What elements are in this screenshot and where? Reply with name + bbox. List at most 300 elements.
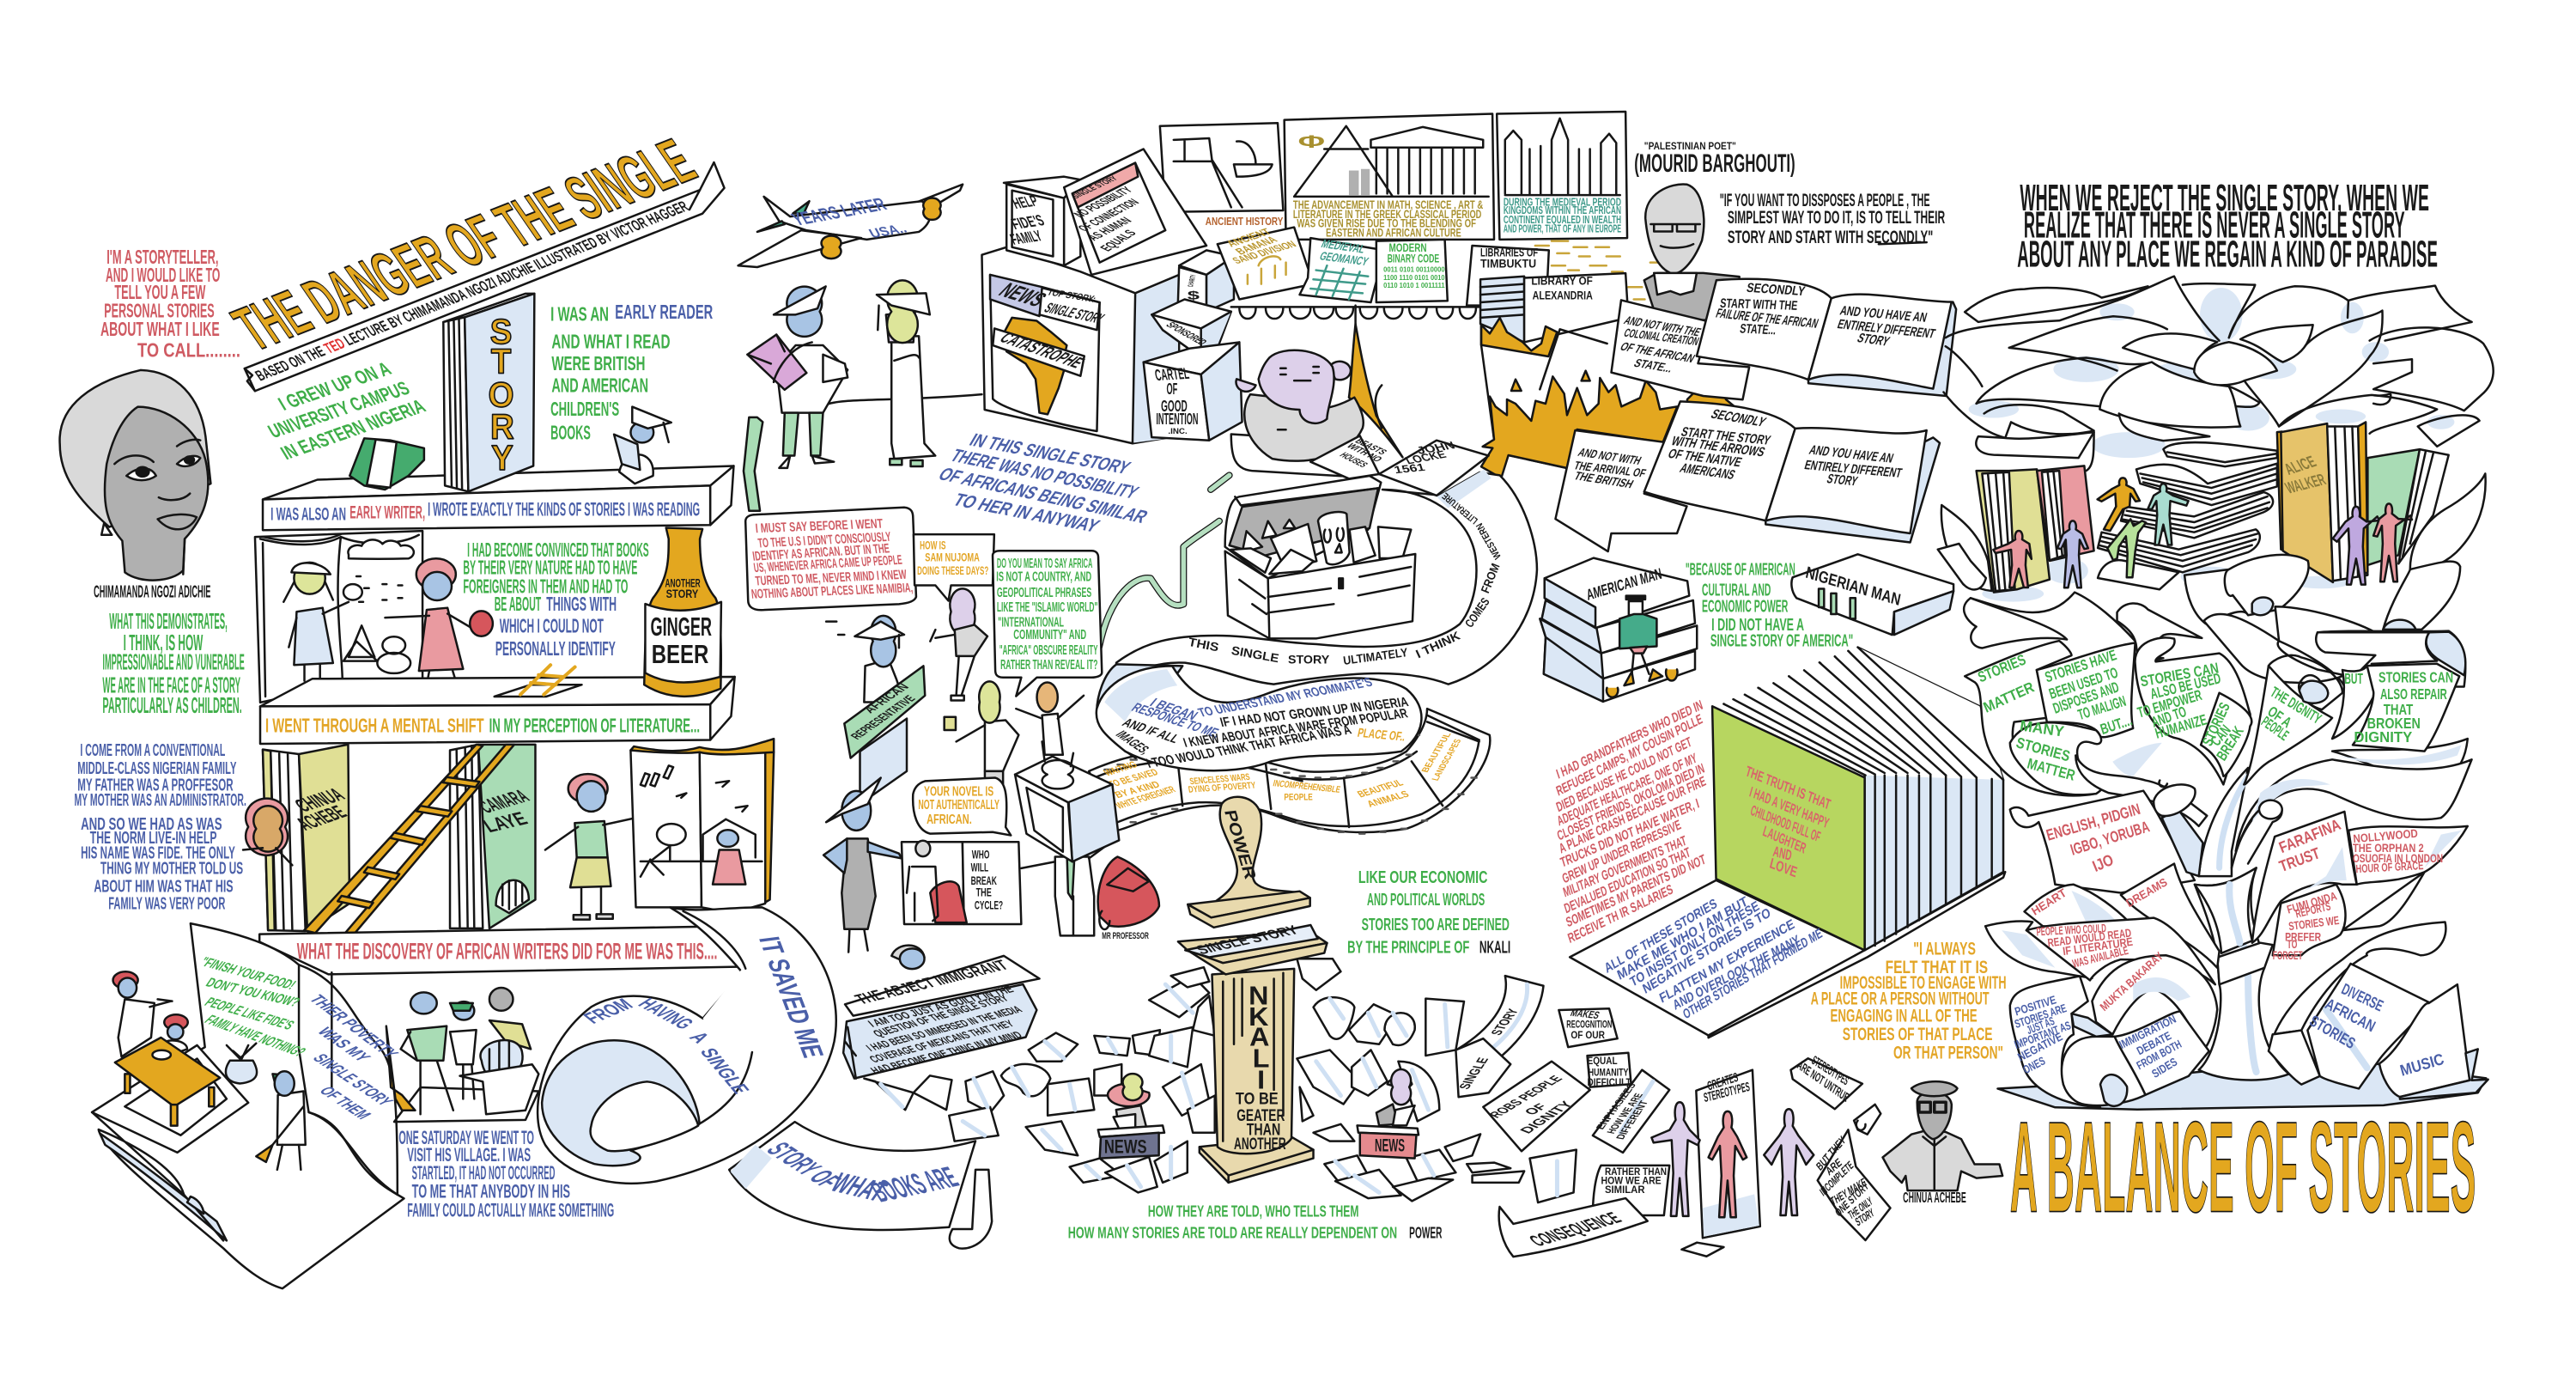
tilted screen: single story news: EQUALS [1097, 228, 1139, 253]
page: Fumi Onda [2273, 885, 2346, 955]
text: red tree labels: WAS AVAILABLE [2071, 944, 2129, 971]
figure: girl peeking from behind the book [243, 799, 292, 865]
book stack and Library of Alexandria: LIBRARY OF [1531, 275, 1593, 288]
text: their poverty: WAS MY [313, 1026, 374, 1064]
scroll text: STORY OF [759, 1138, 848, 1192]
text: red tree labels: FUMI ONDA [2286, 889, 2338, 916]
scroll text: WHAT [825, 1166, 893, 1207]
big book: side of pages: THE TRUTH IS THAT [1744, 764, 1832, 813]
ribbon: consequence: CONSEQUENCE [1524, 1209, 1626, 1250]
shelf one [263, 466, 733, 530]
page: robs people of dignity [1483, 1062, 1590, 1151]
bottle: ginger beer [644, 528, 721, 697]
illustration: storybook with children [255, 531, 493, 703]
text: finish your food [197, 954, 310, 1059]
open book: John Locke 1561: HOUSES [1337, 451, 1370, 469]
panel: conversations, film strip and professor: DOING THESE DAYS? [917, 563, 988, 577]
text: grandfathers: I HAD GRANDFATHERS WHO DIED IN [1555, 698, 1704, 782]
film strip: LANDSCAPES [1430, 738, 1463, 782]
panel: years later, USA, and the news: CONTINENT EQUALED IN WEALTH [1504, 213, 1621, 226]
The abject immigrant: QUESTION OF THE SINGLE STORY [870, 992, 1012, 1039]
panel: burning pages and Mourid Barghouti: "IF YOU WANT TO DISSPOSES A PEOPLE , THE [1720, 190, 1930, 210]
bubble: I must say: I MUST SAY BEFORE I WENT [755, 517, 884, 536]
sheet: creates stereotypes: STEREOTYPES [1703, 1080, 1751, 1105]
film strip: BY A KIND [1113, 779, 1163, 800]
page: colonial creation: OF THE AFRICAN [1618, 340, 1698, 365]
newsreader: left: NEWS [1104, 1137, 1147, 1158]
text: stories matter: OF A [2264, 703, 2295, 731]
book: open storybook with village [630, 739, 774, 913]
text: their poverty: SINGLE STORY [308, 1052, 397, 1109]
bubble: I must say [745, 508, 916, 610]
newsreader: right [1358, 1069, 1419, 1159]
text: grandfathers: TRUCKS DID NOT HAVE WATER, I [1559, 796, 1701, 871]
book: Story: Y [491, 439, 513, 478]
book: Nigerian man: NIGERIAN MAN [1804, 563, 1902, 609]
bubble: Africa is not a country: "INTERNATIONAL [998, 616, 1064, 630]
portrait: Chimamanda Ngozi Adichie [60, 370, 210, 581]
page: stereotypes are not untrue [1791, 1053, 1862, 1109]
film strip: WHITE FOREIGNER [1114, 784, 1178, 812]
page: medieval geomancy: GEOMANCY [1317, 250, 1370, 269]
ribbon: WESTERN [1474, 521, 1504, 561]
book stack and Library of Alexandria [1480, 273, 1628, 342]
text: early reader: BOOKS [550, 422, 591, 444]
text: blue tree labels: FROM BOTH [2135, 1038, 2184, 1072]
ribbon: ULTIMATELY [1342, 645, 1409, 667]
open book with Fide's family pages [92, 923, 404, 1288]
illustration: paper flower, books and climbers [1938, 277, 2494, 687]
panel: conversations, film strip and professor: TURNED TO ME, NEVER MIND I KNEW [755, 568, 908, 588]
panel: burning pages and Mourid Barghouti [1555, 140, 2438, 551]
text: blue tree labels: MUSIC [2398, 1050, 2445, 1080]
book: Story: R [490, 407, 514, 447]
portrait: Mourid Barghouti [1644, 185, 1740, 320]
big scroll loop [538, 907, 836, 1184]
text: all of these stories: NEGATIVE STORIES IS TO [1641, 905, 1773, 997]
tilted screen: single story news: OF CONNECTION [1075, 198, 1143, 234]
quote: I always felt: OR THAT PERSON" [1893, 1043, 2003, 1063]
pot [226, 1044, 257, 1084]
ribbon: this single story ultimately comes from Western literature, and chest [1099, 470, 1537, 685]
icon: large news television: CATASTROPHE [995, 330, 1089, 371]
bottom scroll band [729, 1122, 992, 1249]
bubble: Sam Nujoma: HOW IS [920, 539, 945, 551]
text: stories matter: PEOPLE [2258, 713, 2292, 744]
scroll: stories matter [1965, 641, 2207, 826]
text: stories matter: BROKEN [2367, 715, 2421, 732]
text: because of American power [1686, 559, 1853, 650]
text: red tree labels: OSUOFIA IN LONDON [2353, 852, 2443, 865]
panel: African writers, Fide's story and saved-by-stories scroll: WHAT THE DISCOVERY OF AFRICAN WRITERS DID FOR ME WAS THIS.... [297, 938, 717, 964]
text: blue tree labels: DEBATE [2135, 1029, 2173, 1057]
book: Alice Walker: WALKER [2282, 470, 2329, 497]
bubble: Sam Nujoma: SAM NUJOMA [925, 551, 980, 564]
page: but, and can also repair [2332, 664, 2459, 752]
panel: Greek classical period: Φ [1298, 131, 1325, 152]
figure: African representative with podium [826, 616, 925, 804]
film strip [1089, 709, 1490, 834]
text: grandfathers: SOMETIMES MY PARENTS DID NOT [1564, 852, 1708, 931]
text: grandfathers: GREW UP UNDER REPRESSIVE [1561, 818, 1683, 887]
ribbon: I began to understand my roommate's response: I BEGAN [1146, 697, 1200, 723]
bubble: your novel: AFRICAN. [927, 812, 972, 827]
ribbon: I began to understand my roommate's response: IMAGES, [1112, 729, 1154, 757]
pillar: Nkali: GEATER [1236, 1106, 1285, 1124]
The abject immigrant: COVERAGE OF MEXICANS THAT THEY [866, 1018, 1017, 1065]
text: grandfathers: REFUGEE CAMPS, MY COUSIN POLLE [1555, 712, 1704, 800]
panel: African writers, Fide's story and saved-by-stories scroll: I COME FROM A CONVENTIONAL [80, 740, 225, 760]
ribbon: I began to understand my roommate's response: TO UNDERSTAND MY ROOMMATE'S [1196, 676, 1375, 720]
ribbon: I began to understand my roommate's response: AND IF ALL [1119, 715, 1183, 746]
text: early reader: AND AMERICAN [551, 374, 648, 397]
ribbon: consequence [1499, 1198, 1648, 1257]
book: who will break the cycle: THE [976, 886, 992, 898]
shelf two: I WENT THROUGH A MENTAL SHIFT [265, 715, 484, 736]
text: grew up [264, 359, 429, 464]
panel: years later, USA, and the news: OF AFRICANS BEING SIMILAR [934, 465, 1151, 527]
text: red tree labels: THE ORPHAN 2 [2353, 842, 2424, 855]
panel: conversations, film strip and professor: COMMUNITY" AND [1013, 628, 1086, 642]
open book: secondly, failure of the African state: AND YOU HAVE AN [1838, 303, 1929, 325]
pillar: Nkali: L [1253, 1044, 1269, 1073]
bottle: ginger beer: BEER [652, 640, 708, 669]
box: charity: CHARITY [1186, 274, 1198, 287]
heading: in this single story [934, 430, 1151, 536]
quote: Mourid Barghouti: "PALESTINIAN POET" [1644, 140, 1736, 152]
quote: I always felt: "I ALWAYS [1913, 939, 1976, 959]
text: all of these stories: AND OVERLOOK THE MANY [1671, 933, 1801, 1014]
text: blue tree labels: NEGATIVE [2015, 1030, 2064, 1064]
text: all of these stories [1603, 894, 1825, 1023]
text: stories matter: STORIES CAN [2379, 668, 2453, 686]
panel: conversations, film strip and professor: NOT AUTHENTICALLY [918, 797, 999, 813]
text: all of these stories: MAKE ME WHO I AM BUT [1615, 894, 1750, 983]
text: one Saturday [398, 1127, 614, 1221]
text: introduction: TELL YOU A FEW [114, 281, 206, 303]
text: stories matter [1975, 646, 2453, 784]
ribbon: I began to understand my roommate's response: IF I HAD NOT GROWN UP IN NIGERIA [1218, 695, 1410, 730]
right ribbons [2236, 739, 2472, 851]
figure: John Locke [1231, 350, 1382, 478]
page: diverse African stories [2269, 964, 2431, 1088]
figure: Mr Professor with television head [1015, 741, 1149, 941]
book: Alice Walker: ALICE [2281, 453, 2319, 478]
text: RATHER THAN [1605, 1166, 1667, 1177]
page: Dreams [2121, 864, 2220, 968]
text: introduction: PERSONAL STORIES [104, 300, 215, 322]
open book: secondly, failure of the African state: FAILURE OF THE AFRICAN [1714, 306, 1820, 331]
chest [1225, 476, 1415, 638]
text: because of American power: CULTURAL AND [1702, 580, 1771, 600]
scroll text: FROM [579, 995, 638, 1027]
text: red tree labels: FORGET [2273, 949, 2303, 962]
text: red tree labels: HEART [2029, 886, 2069, 918]
pillar: Nkali: ANOTHER [1234, 1135, 1286, 1154]
newsreader: left [1098, 1074, 1164, 1159]
spyglass scroll [2154, 781, 2202, 876]
big book: side of pages: CHILDHOOD FULL OF [1749, 803, 1822, 846]
text: red tree labels: REPORTS [2294, 899, 2332, 921]
pillar: Nkali: A [1249, 1022, 1269, 1051]
pillar: Nkali: I [1257, 1065, 1265, 1094]
text: their poverty: THIER POVERTY [305, 993, 403, 1061]
page: modern binary code: 0011 0101 00110000 [1383, 266, 1445, 273]
text: blue tree labels: IMPORTANT AS [2013, 1019, 2073, 1051]
panel: stamp of power [1188, 797, 1310, 928]
page: blank scroll [1530, 1150, 1577, 1202]
page: colonial creation: COLONIAL CREATION [1622, 326, 1701, 348]
open book: John Locke 1561: LOCKE [1403, 448, 1449, 466]
The abject immigrant: HAD BECOME ONE THING IN MY MIND [867, 1029, 1025, 1076]
figure: Chinua Achebe [1883, 1081, 2002, 1206]
text: red tree labels: IJO [2090, 850, 2116, 875]
big book: side of pages: LOVE [1768, 855, 1799, 881]
panel: African writers, Fide's story and saved-by-stories scroll: TO ME THAT ANYBODY IN HIS [412, 1181, 570, 1202]
open book: John Locke 1561: WITH NO [1344, 441, 1385, 464]
text: stories matter: ALSO BE USED [2148, 669, 2222, 703]
panel: stamp of power, Nkali, news desks: DIFFICULT [1588, 1076, 1631, 1088]
box: charity: $ [1188, 289, 1200, 302]
panel: African writers, Fide's story and saved-by-stories scroll: CHINUA [290, 785, 349, 816]
box: help Fide's family: HELP [1010, 192, 1041, 212]
text: grew up: I GREW UP ON A [275, 359, 395, 415]
panel: years later, USA, and the news: LITERATURE IN THE GREEK CLASSICAL PERIOD [1293, 208, 1481, 221]
sheet: creates stereotypes: CREATES [1706, 1070, 1740, 1093]
text: stories matter: TO MALIGN [2075, 692, 2128, 723]
page: stereotypes are not untrue: ARE NOT UNTRUE [1795, 1058, 1851, 1105]
icon: airplane: YEARS LATER [788, 194, 890, 229]
ribbon: SINGLE [1230, 643, 1280, 665]
ribbon: LITERATURE [1441, 490, 1480, 526]
tilted screen: single story news: AS HUMAN [1084, 216, 1135, 243]
text: red tree labels: ENGLISH, PIDGIN [2044, 800, 2142, 844]
text: stories matter: STORIES HAVE [2043, 646, 2118, 685]
panel: conversations, film strip and professor [745, 508, 1490, 953]
panel: stamp of power, Nkali, news desks: AND POLITICAL WORLDS [1367, 890, 1485, 909]
text: grandfathers: CLOSEST FRIENDS, OKOLOMA DIED IN [1556, 761, 1706, 844]
page: but they are incomplete: THEY MAKE [1829, 1175, 1868, 1208]
book: Story: O [489, 376, 514, 415]
text: conventional family [74, 740, 246, 914]
page: robs people of dignity: DIGNITY [1517, 1099, 1577, 1135]
text: red tree labels: READ WOULD READ [2047, 926, 2132, 950]
ribbon: I began to understand my roommate's response: RESPONCE TO ME, [1128, 701, 1224, 741]
scroll: English, Pidgin [2010, 791, 2195, 893]
heading: in this single story: IN THIS SINGLE STORY [966, 430, 1134, 478]
page: libraries of Timbuktu: TIMBUKTU [1480, 257, 1536, 271]
text: stories matter: DIGNITY [2354, 728, 2413, 746]
page: Nollywood [2348, 826, 2468, 885]
panel: stamp of power, Nkali, news desks: HOW THEY ARE TOLD, WHO TELLS THEM [1148, 1202, 1358, 1221]
text: all of these stories: ALL OF THESE STORIES [1603, 897, 1719, 977]
ancient history parchment [1160, 123, 1284, 228]
page: Music [2379, 984, 2488, 1099]
page: modern binary code: MODERN [1389, 241, 1427, 255]
page: rather than [1593, 1166, 1669, 1215]
panel: African writers, Fide's story and saved-by-stories scroll [74, 739, 992, 1288]
ribbon: I began to understand my roommate's response: I TOO WOULD THINK THAT AFRICA WAS A [1145, 722, 1354, 771]
panel: years later, USA, and the news: DURING THE MEDIEVAL PERIOD [1504, 196, 1621, 208]
figures climbing and reading [1993, 478, 2412, 587]
panel: African writers, Fide's story and saved-by-stories scroll: ABOUT HIM WAS THAT HIS [94, 877, 234, 897]
book: green [2367, 449, 2449, 565]
book stack and Library of Alexandria: ALEXANDRIA [1533, 289, 1593, 302]
sheet: creates stereotypes [1696, 1070, 1760, 1238]
open book: secondly, arrows of Native Americans: SECONDLY [1708, 406, 1769, 429]
book: Story [443, 294, 534, 491]
box: help Fide's family [1004, 177, 1080, 265]
figure: man on television [1016, 682, 1084, 755]
text: stories matter: THAT [2384, 701, 2414, 718]
icon: large news television: TOP STORY: [1045, 287, 1097, 305]
text: red tree labels: HOUR OF GRACE [2355, 859, 2424, 875]
ribbon: I THINK [1413, 629, 1462, 660]
text: stories matter: STORIES [2014, 734, 2072, 764]
text: grandfathers: DIED BECAUSE HE COULD NOT GET [1555, 735, 1693, 816]
big book: side of pages: LAUGHTER [1761, 824, 1807, 857]
page: but they are incomplete: ARE [1824, 1155, 1844, 1178]
text: because of American power: "BECAUSE OF AMERICAN [1686, 559, 1795, 579]
quote: I always felt: FELT THAT IT IS [1886, 958, 1988, 978]
figure: Chinua Achebe: CHINUA ACHEBE [1903, 1190, 1966, 1206]
open book: secondly, arrows of Native Americans: WITH THE ARROWS [1669, 434, 1767, 460]
open book: John Locke 1561: JOHN [1414, 439, 1457, 456]
open book: John Locke 1561: 1561 [1393, 461, 1426, 476]
icon: large news television [981, 247, 1179, 443]
open book: John Locke 1561 [1310, 435, 1489, 496]
heading: in this single story: TO HER IN ANYWAY [950, 490, 1103, 536]
open book: John Locke 1561: BEASTS [1352, 437, 1389, 456]
panel: stamp of power, Nkali, news desks: POWER [1409, 1224, 1442, 1242]
page: libraries of Timbuktu [1467, 246, 1549, 306]
text: convinced books had foreigners: PERSONALLY IDENTIFY [495, 637, 616, 660]
open book: secondly, arrows of Native Americans: AND YOU HAVE AN [1807, 442, 1896, 466]
panel: African writers, Fide's story and saved-by-stories scroll: HIS NAME WAS FIDE. THE ONLY [81, 843, 235, 863]
figure: woman author [823, 778, 902, 953]
panel: title, introduction and bookshelf: WHAT THIS DEMONSTRATES, [109, 610, 228, 634]
panel: title, introduction and bookshelf: AND I WOULD LIKE TO [106, 265, 220, 286]
text: grandfathers: MILITARY GOVERNMENTS THAT [1562, 834, 1688, 901]
lower scrolls [2269, 872, 2445, 1056]
panel: title, introduction and bookshelf: IMPRESSIONABLE AND VUNERABLE [102, 651, 245, 675]
shelf two [260, 677, 735, 744]
panel: stamp of power, Nkali, news desks [843, 868, 1669, 1257]
text: red tree labels: IF LITERATURE [2062, 935, 2134, 958]
scroll: positive stories [2010, 976, 2100, 1107]
text: introduction: I'M A STORYTELLER, [106, 246, 219, 268]
text: grandfathers: DEVALUED EDUCATION SO THAT [1563, 845, 1692, 917]
text: stories matter: TO EMPOWER [2136, 686, 2204, 721]
text: stories matter: BREAK [2213, 722, 2247, 764]
coins [1535, 241, 1672, 299]
text: what this demonstrates [102, 610, 245, 718]
panel: years later, USA, and the news: BINARY CODE [1388, 252, 1439, 265]
figure: African representative with podium: REPRESENTATIVE [848, 694, 919, 742]
text: stories matter: STORIES [1975, 650, 2028, 685]
bottle: ginger beer: ANOTHER [665, 576, 701, 590]
quote: Mourid Barghouti [1634, 140, 1945, 247]
panel: African writers, Fide's story and saved-by-stories scroll: FAMILY WAS VERY POOR [108, 894, 225, 914]
text: convinced books had foreigners: BE ABOUT [495, 593, 541, 615]
page: emphasizes: HOW WE ARE [1606, 1093, 1646, 1135]
book: Camara Laye [450, 745, 535, 928]
text: convinced books had foreigners: THINGS WITH [546, 593, 617, 615]
text: convinced books had foreigners: WHICH I COULD NOT [500, 615, 604, 637]
panel: conversations, film strip and professor: DO YOU MEAN TO SAY AFRICA [997, 557, 1093, 571]
blue and white scattered pages, left [864, 967, 1215, 1192]
quote: I always felt: IMPOSSIBLE TO ENGAGE WITH [1840, 972, 2007, 993]
bubble: Sam Nujoma [914, 534, 994, 600]
open book: secondly, arrows of Native Americans [1644, 401, 1940, 543]
page: arrival of the British: AND NOT WITH [1576, 446, 1643, 467]
figure: child reading [614, 407, 671, 484]
text: one Saturday: VISIT HIS VILLAGE. I WAS [407, 1144, 531, 1166]
scroll text: SINGLE [695, 1046, 754, 1096]
page: but they are incomplete: ONE STORY [1832, 1178, 1871, 1220]
text: blue tree labels: IMMIGRATION [2117, 1013, 2178, 1051]
book: Story: S [490, 313, 512, 351]
text: grandfathers: RECEIVE TH IR SALARIES [1566, 882, 1675, 947]
ribbon: I began to understand my roommate's response: I KNEW ABOUT AFRICA WARE FROM POPULAR [1182, 706, 1410, 751]
icon: airplane: USA.. [866, 221, 909, 240]
figure: reporter two [945, 681, 1018, 784]
figure: student with books [747, 286, 848, 468]
text: all of these stories: TO INSIST ONLY ON THESE [1628, 899, 1762, 990]
text: finish your food: DON'T YOU KNOW? [203, 975, 302, 1010]
panel: African writers, Fide's story and saved-by-stories scroll: AND SO WE HAD AS WAS [81, 814, 222, 834]
scroll text [579, 934, 964, 1208]
text: introduction: TO CALL........ [137, 339, 240, 361]
open book: secondly, arrows of Native Americans: STORY [1826, 472, 1860, 489]
box: charity [1178, 250, 1234, 312]
tilted screen: single story news: NO POSSIBILITY [1071, 185, 1136, 220]
text: blue tree labels: AFRICAN [2323, 995, 2379, 1035]
text: how stories are told [1068, 1202, 1442, 1242]
panel: years later, USA, and the news: EASTERN AND AFRICAN CULTURE [1326, 227, 1461, 240]
blue shading [1969, 288, 2454, 602]
panel: title, introduction and bookshelf: FOREIGNERS IN THEM AND HAD TO [463, 575, 628, 598]
scroll text: A [683, 1029, 714, 1046]
text: blue tree labels [2013, 979, 2445, 1081]
text: I WROTE EXACTLY THE KINDS OF STORIES I WAS READING [428, 500, 700, 520]
page: emphasizes [1593, 1070, 1669, 1153]
page: story [1459, 976, 1544, 1064]
film strip: DYING OF POVERTY [1188, 781, 1257, 795]
panel: title, introduction and bookshelf: BY THEIR VERY NATURE HAD TO HAVE [463, 557, 637, 579]
heading: when we reject the single story [2017, 176, 2438, 275]
leaves and scrolls [1938, 473, 2486, 687]
river [1099, 475, 1230, 647]
scroll: immigration debate [2062, 1012, 2209, 1106]
panel: balance of stories paper tree [1965, 637, 2488, 1239]
text: BOOKS ARE [866, 1161, 964, 1208]
stack: American man: AMERICAN MAN [1585, 564, 1663, 604]
subtitle ribbon [245, 162, 725, 391]
page: ancient Bamana sand division: SAND DIVISION [1230, 240, 1299, 266]
book: Camara Laye: LAYE [479, 808, 532, 837]
text: grandfathers: ADEQUATE HEALTHCARE, ONE OF MY [1556, 752, 1699, 830]
ribbon: I began to understand my roommate's response [1097, 664, 1421, 771]
box: cartel of good intention: INTENTION [1156, 411, 1198, 428]
panel: conversations, film strip and professor: IS NOT A COUNTRY, AND [996, 570, 1091, 584]
text: stories matter: BUT.... [2098, 711, 2135, 738]
box: cartel of good intention [1144, 342, 1242, 441]
shelf three [259, 927, 742, 974]
text: AND POWER, THAT OF ANY IN EUROPE [1504, 222, 1621, 234]
text: economic and political worlds [1347, 868, 1510, 957]
box: help Fide's family: FIDE'S [1009, 212, 1047, 233]
